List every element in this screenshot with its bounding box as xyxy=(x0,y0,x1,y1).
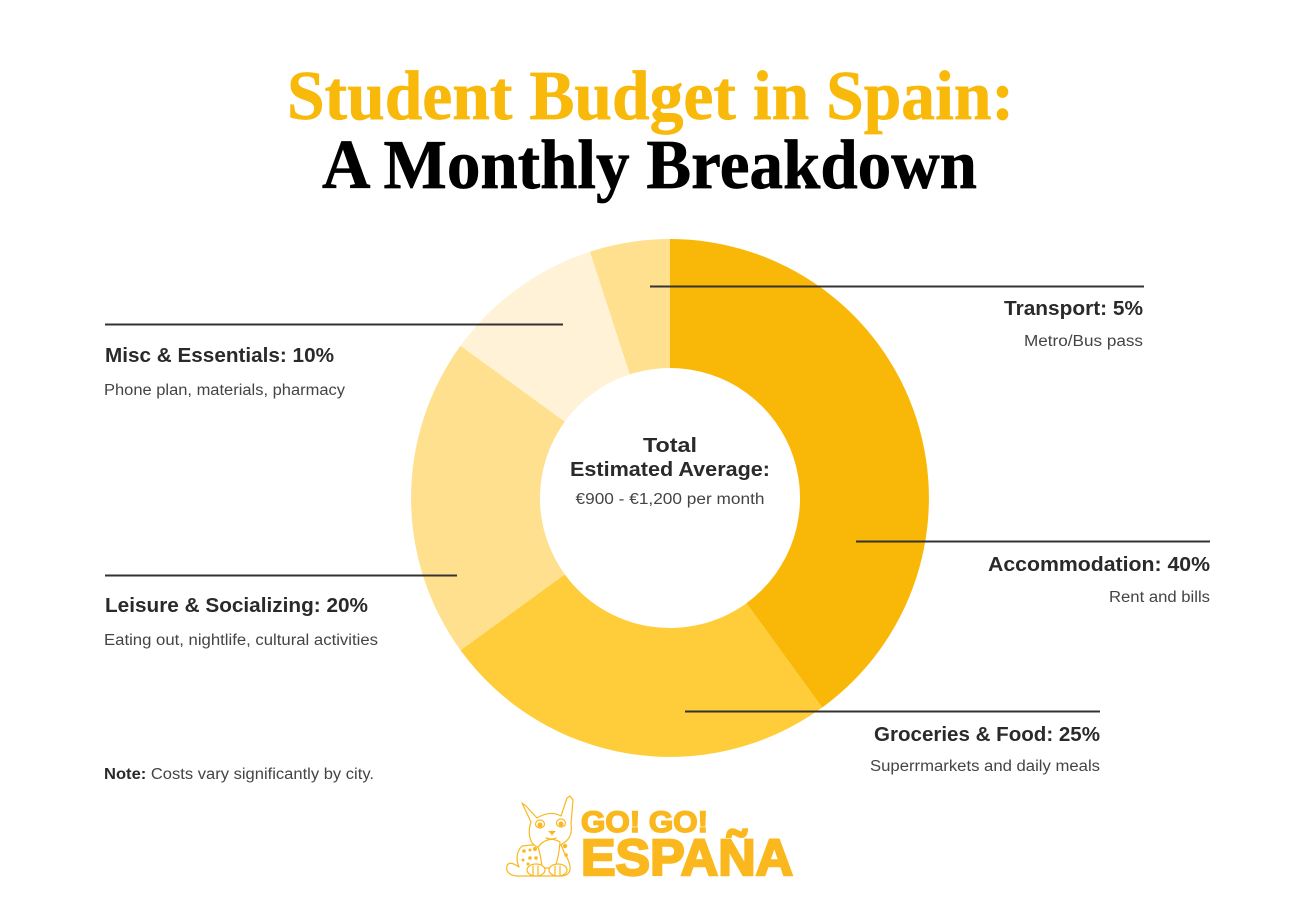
callout: accommodation xyxy=(856,542,1210,606)
callout: misc and essentials: Misc & Essentials: 10% xyxy=(105,345,334,367)
callout: accommodation: Rent and bills xyxy=(1109,589,1210,606)
segment: transport 5% xyxy=(590,239,670,374)
logo wordmark: ESPAÑA xyxy=(581,828,793,886)
donut chart xyxy=(411,239,929,757)
segment: leisure 20% xyxy=(411,346,565,650)
callout: groceries and food xyxy=(685,712,1100,775)
logo wordmark: GO! GO! xyxy=(581,806,708,839)
center label: Total xyxy=(643,435,697,457)
center label xyxy=(570,435,770,508)
callout: groceries and food: Superrmarkets and daily meals xyxy=(870,758,1100,775)
note: Note: Costs vary significantly by city. xyxy=(104,766,374,783)
logo: Go Go España xyxy=(507,796,793,886)
center label: Estimated Average: xyxy=(570,459,770,481)
callout: groceries and food: Groceries & Food: 25% xyxy=(874,724,1100,746)
segment: misc 10% xyxy=(460,252,630,422)
title: A Monthly Breakdown xyxy=(322,127,977,204)
segment: groceries 25% xyxy=(460,574,822,757)
title xyxy=(287,58,1014,204)
callout: misc and essentials: Phone plan, materials, pharmacy xyxy=(104,382,345,399)
callout: transport: Transport: 5% xyxy=(1004,298,1143,320)
center label: €900 - €1,200 per month xyxy=(576,491,764,508)
callout: accommodation: Accommodation: 40% xyxy=(988,554,1210,576)
title: Student Budget in Spain: xyxy=(287,58,1014,135)
callout: misc and essentials xyxy=(104,324,563,399)
callout: transport: Metro/Bus pass xyxy=(1024,333,1143,350)
callout: leisure and socializing xyxy=(104,576,457,649)
segment: accommodation 40% xyxy=(670,239,929,708)
callout: leisure and socializing: Eating out, nightlife, cultural activities xyxy=(104,632,378,649)
callout: transport xyxy=(650,286,1144,350)
icon: lynx mascot xyxy=(507,796,573,876)
callout: leisure and socializing: Leisure & Socializing: 20% xyxy=(105,595,368,617)
